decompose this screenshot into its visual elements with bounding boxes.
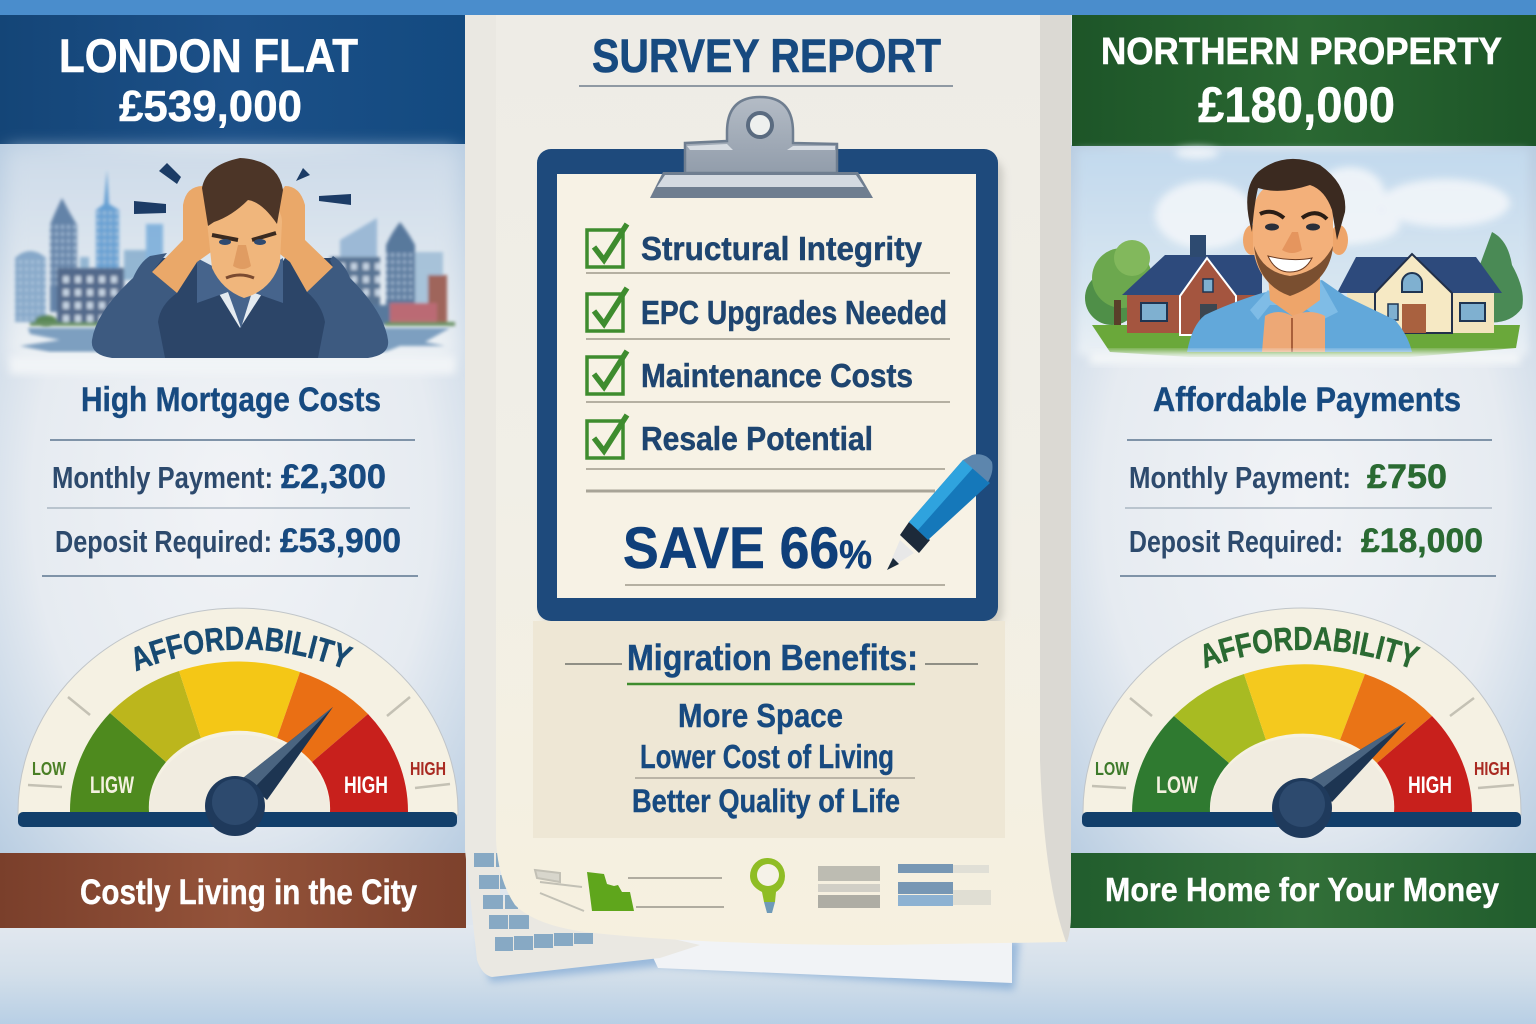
icon: green chart (587, 872, 634, 911)
gauge scale labels (1095, 759, 1510, 799)
header: London flat title and price: LONDON FLAT (59, 29, 358, 82)
header: Northern property title and price (1072, 15, 1536, 146)
gauge: affordability, London (18, 608, 458, 836)
item: structural integrity: Structural Integrity (641, 230, 923, 267)
gauge scale labels: HIGH (344, 772, 388, 799)
heading: Migration Benefits: (627, 637, 918, 678)
gauge scale labels: LIGW (90, 772, 134, 799)
icon: pen (887, 454, 992, 570)
monthly payment: £2,300 (281, 458, 386, 496)
right house (1337, 254, 1502, 333)
checklist (586, 224, 950, 469)
stacked papers behind report (465, 15, 1020, 990)
smiling man (1187, 159, 1412, 352)
heading: Affordable Payments: Affordable Payments (1153, 381, 1461, 419)
item: maintenance costs: Maintenance Costs (641, 357, 913, 394)
benefit list: More Space (678, 697, 843, 734)
banner: more home: More Home for Your Money (1105, 871, 1500, 908)
right back sheet (1040, 15, 1071, 942)
gauge scale labels: LOW (1095, 759, 1129, 779)
left back sheet (465, 15, 700, 977)
banner: costly living (0, 853, 466, 928)
heading: High Mortgage Costs: High Mortgage Costs (81, 381, 381, 419)
panel: London flat (0, 15, 466, 928)
clipboard (537, 97, 1003, 628)
gauge scale labels: LOW (1156, 772, 1198, 799)
icon: grey table (818, 866, 880, 908)
item: resale potential: Resale Potential (641, 420, 873, 457)
city skyline (15, 170, 455, 327)
item: resale potential (586, 415, 945, 469)
water (20, 328, 450, 352)
item: maintenance costs (586, 351, 950, 402)
lower sheet (640, 930, 1012, 983)
banner: more home (1069, 853, 1536, 928)
clouds (1155, 147, 1510, 249)
benefit list (632, 697, 915, 819)
gauge scale labels (32, 759, 446, 799)
deposit required: £53,900 (280, 522, 401, 560)
header: Northern property title and price: £180,000 (1198, 77, 1395, 133)
lawn (1092, 325, 1520, 357)
item: EPC upgrades (586, 288, 950, 339)
benefit list: Better Quality of Life (632, 783, 900, 819)
gauge title: AFFORDABILITY (134, 626, 354, 672)
trees (1085, 232, 1523, 330)
deposit required: £18,000 (1361, 522, 1483, 560)
top blue band (0, 0, 1536, 15)
gauge scale labels: HIGH (410, 759, 446, 779)
icon: bulb (750, 858, 785, 913)
monthly payment: Monthly Payment: (52, 460, 273, 495)
panel: Northern property (1070, 15, 1536, 928)
panel: migration benefits (533, 621, 1005, 838)
man with hands on head (92, 158, 388, 358)
gauge title: AFFORDABILITY (1204, 626, 1421, 668)
footer icons on report (535, 858, 991, 913)
metal clip (650, 97, 873, 198)
illustration: stressed man and city skyline (8, 150, 456, 374)
left house (1122, 235, 1262, 335)
callout: save 66%: SAVE 66% (623, 516, 872, 581)
monthly payment: Monthly Payment: (1129, 460, 1351, 495)
gauge: affordability, Northern (1082, 608, 1522, 838)
stress marks (134, 163, 351, 214)
header: Northern property title and price: NORTHERN PROPERTY (1101, 31, 1502, 73)
heading: survey report: SURVEY REPORT (592, 29, 941, 82)
banner: costly living: Costly Living in the City (80, 873, 417, 912)
bottom background strip (0, 925, 1536, 1024)
deposit required: Deposit Required: (1129, 524, 1343, 559)
benefit list: Lower Cost of Living (640, 738, 894, 775)
panel: survey report sheet (496, 15, 1066, 945)
gauge scale labels: HIGH (1474, 759, 1510, 779)
deposit required (1129, 522, 1483, 560)
grid squares (474, 853, 593, 951)
item: structural integrity (586, 224, 950, 273)
illustration: happy man and houses (1078, 147, 1528, 364)
gauge needle (1272, 722, 1406, 838)
header: London flat title and price (0, 15, 465, 144)
icon: blue table (898, 864, 991, 906)
gauge needle (205, 707, 333, 836)
deposit required: Deposit Required: (55, 524, 272, 559)
gauge scale labels: HIGH (1408, 772, 1452, 799)
monthly payment: £750 (1367, 458, 1447, 496)
gauge scale labels: LOW (32, 759, 66, 779)
item: EPC upgrades: EPC Upgrades Needed (641, 294, 947, 331)
header: London flat title and price: £539,000 (119, 82, 302, 131)
